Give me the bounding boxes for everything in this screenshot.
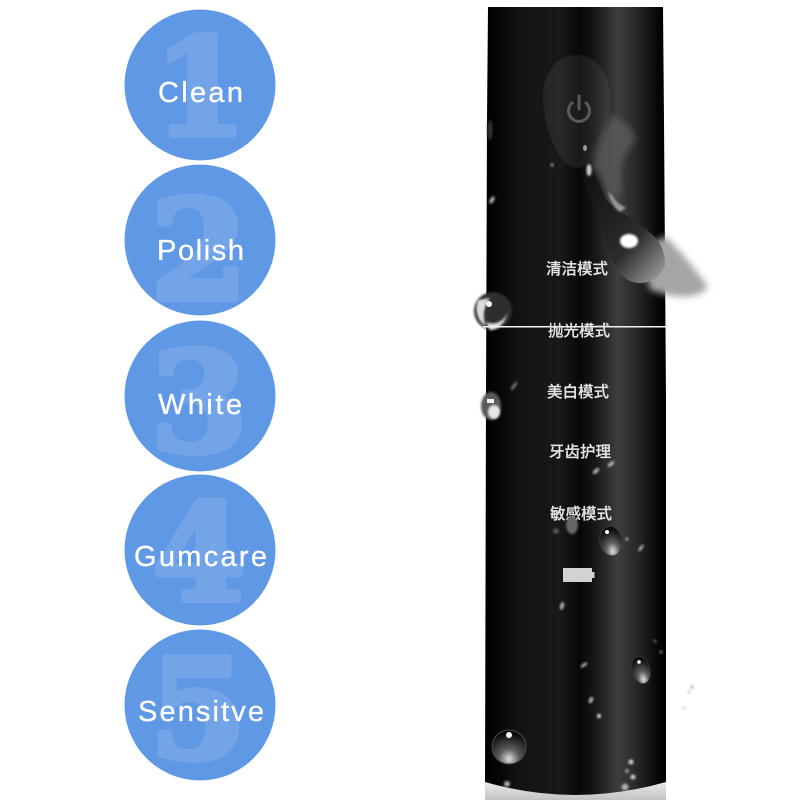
water drop at left edge bbox=[481, 392, 501, 420]
label: Polish: Polish bbox=[157, 235, 244, 267]
battery icon bbox=[563, 568, 594, 582]
handle base bbox=[485, 775, 666, 800]
power button panel bbox=[543, 55, 610, 168]
numeral 5: 5 bbox=[149, 628, 247, 791]
water streak with large drop bbox=[582, 115, 708, 296]
divider line bbox=[483, 326, 667, 328]
faint droplets outside the handle bbox=[683, 685, 694, 709]
mode badge: Clean bbox=[124, 9, 276, 167]
water drop left of divider bbox=[474, 292, 512, 330]
numeral 1: 1 bbox=[153, 9, 247, 167]
small water droplets bbox=[488, 120, 662, 790]
numeral 4: 4 bbox=[152, 474, 246, 632]
label: Gumcare: Gumcare bbox=[134, 541, 267, 573]
handle body bbox=[485, 7, 666, 795]
mode labels bbox=[546, 260, 613, 523]
mode labels: 美白模式 bbox=[547, 383, 610, 401]
mode labels: 牙齿护理 bbox=[549, 443, 612, 461]
label: White: White bbox=[158, 389, 242, 421]
water drop lower right bbox=[629, 654, 653, 686]
water drop lower left bbox=[492, 730, 526, 764]
mode labels: 敏感模式 bbox=[550, 505, 613, 523]
numeral 3: 3 bbox=[150, 321, 248, 484]
mode badge: Sensitve bbox=[124, 628, 276, 791]
numeral 2: 2 bbox=[150, 169, 248, 332]
mode labels: 抛光模式 bbox=[548, 322, 611, 340]
mode badge: Gumcare bbox=[124, 474, 276, 632]
mode badge: Polish bbox=[124, 164, 276, 332]
label: Clean: Clean bbox=[158, 77, 243, 109]
water drop near sensitive label bbox=[598, 524, 624, 558]
toothbrush handle bbox=[474, 7, 708, 800]
mode badge: White bbox=[124, 320, 276, 484]
label: Sensitve: Sensitve bbox=[138, 696, 264, 728]
power icon bbox=[569, 96, 590, 121]
mode labels: 清洁模式 bbox=[546, 260, 609, 278]
